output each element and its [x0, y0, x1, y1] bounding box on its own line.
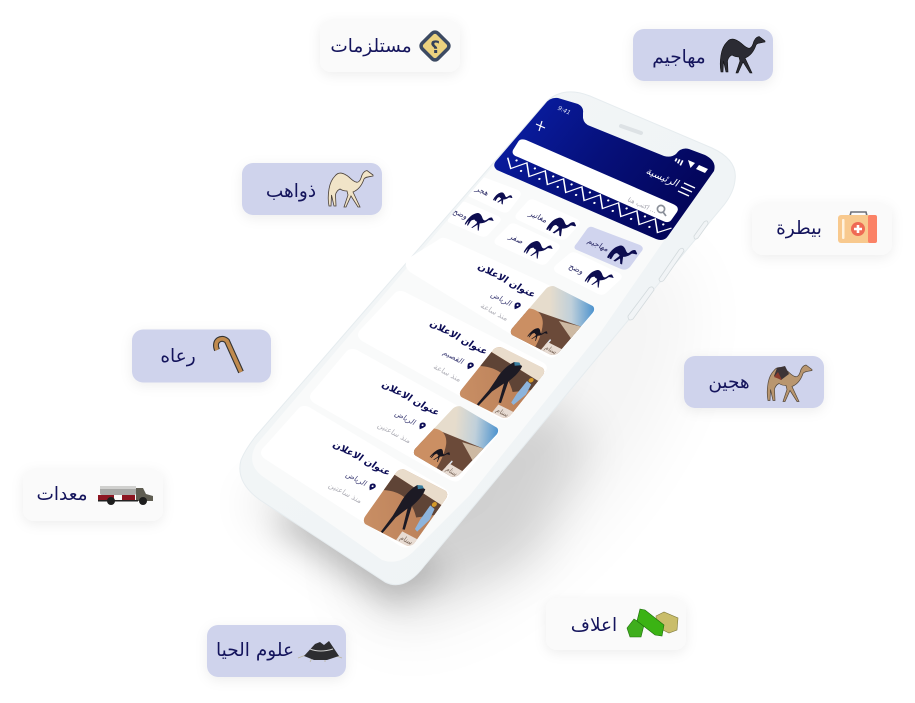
chip: hajar: هجر	[473, 184, 491, 197]
icon: saddled camel	[767, 365, 812, 402]
card 4 time: منذ ساعتين	[327, 481, 364, 505]
phone side buttons	[628, 221, 708, 320]
chip: mahajeem: مهاجيم	[586, 237, 611, 253]
card 2 photo	[457, 345, 547, 420]
label: tent supplies: علوم الحيا	[216, 640, 294, 661]
badge: tent supplies	[207, 625, 346, 677]
chip: wadih second row	[452, 210, 494, 231]
card 4 pin	[367, 482, 377, 492]
icon: medical kit	[838, 212, 877, 243]
card 3 location: الرياض	[393, 409, 418, 427]
chip: mahajeem	[574, 227, 643, 270]
search box	[513, 139, 678, 222]
label: veterinary: بيطرة	[776, 218, 822, 239]
label: equipment: معدات	[36, 484, 88, 505]
listing card 1	[406, 238, 597, 358]
speaker	[621, 126, 641, 133]
card 4 location: الرياض	[344, 470, 369, 488]
label: herders: رعاه	[160, 346, 196, 367]
card 1 photo	[508, 284, 597, 357]
card 2 photo: سنام	[494, 406, 511, 419]
icon: search	[657, 205, 666, 216]
listing card 4	[261, 406, 450, 548]
chip: safar: صفر	[506, 232, 526, 246]
badge: fodder	[546, 598, 686, 650]
status time: 9:41	[556, 105, 572, 116]
chip: hajar	[474, 190, 512, 204]
label: mahajeem: مهاجيم	[652, 47, 706, 68]
search placeholder: اكتب هنا ...	[626, 196, 659, 215]
card 3 time: منذ ساعتين	[376, 421, 413, 445]
card 1 title: عنوان الاعلان	[475, 262, 538, 300]
phone	[240, 92, 735, 585]
card 3 photo: سنام	[444, 465, 460, 478]
card 1 photo: سنام	[543, 344, 559, 356]
icon: cream camel	[328, 170, 373, 207]
chip: maghatir: مغاتير	[526, 209, 550, 225]
icon: black camel	[720, 36, 765, 73]
card 2 time: منذ ساعة	[432, 362, 463, 384]
icon: black tent	[298, 641, 342, 662]
chip: wadih second row: وضح	[451, 207, 470, 221]
header title: الرئيسية	[643, 167, 681, 189]
header panel	[494, 98, 715, 240]
chip: wadih: وضح	[567, 262, 586, 276]
category chips	[452, 190, 643, 288]
card 4 title: عنوان الاعلان	[330, 440, 393, 478]
card 3 photo	[411, 404, 501, 479]
card 3 title: عنوان الاعلان	[379, 380, 442, 418]
label: racing camels: هجين	[708, 372, 750, 393]
icon: tanker truck	[98, 486, 153, 505]
card 2 location: القصيم	[441, 348, 466, 366]
chip: maghatir	[527, 214, 576, 236]
card 1 pin	[512, 302, 522, 310]
badge: racing camels	[684, 356, 824, 408]
listing card 3	[310, 349, 501, 482]
label: fodder: اعلاف	[571, 615, 617, 636]
phone screen	[252, 163, 713, 562]
label: supplies: مستلزمات	[330, 36, 412, 57]
icon: fodder bales	[627, 609, 678, 637]
zigzag pattern	[502, 155, 673, 236]
status icons	[674, 158, 708, 173]
phone body	[240, 92, 735, 585]
chip: wadih	[568, 266, 614, 288]
badge: herders	[132, 330, 271, 382]
card 3 pin	[417, 422, 427, 430]
listing card 2	[358, 291, 547, 420]
card 2 pin	[465, 362, 475, 370]
phone drop shadow	[245, 185, 759, 695]
badge: thawaheb	[242, 163, 382, 215]
card 1 time: منذ ساعة	[479, 301, 510, 323]
icon: question diamond: ؟	[430, 38, 440, 58]
icon: shepherd staff	[216, 339, 241, 372]
badge: equipment	[23, 469, 163, 521]
badge: veterinary	[752, 203, 892, 255]
label: thawaheb: ذواهب	[266, 181, 316, 202]
card 2 title: عنوان الاعلان	[427, 319, 490, 357]
badge: supplies	[320, 20, 460, 72]
icon: menu	[678, 183, 695, 196]
card 1 location: الرياض	[489, 290, 514, 308]
card 4 photo	[361, 467, 450, 548]
icon: plus	[536, 121, 545, 131]
card 4 photo: سنام	[398, 534, 415, 547]
badge: mahajeem	[633, 29, 773, 81]
chip: safar	[507, 236, 552, 259]
